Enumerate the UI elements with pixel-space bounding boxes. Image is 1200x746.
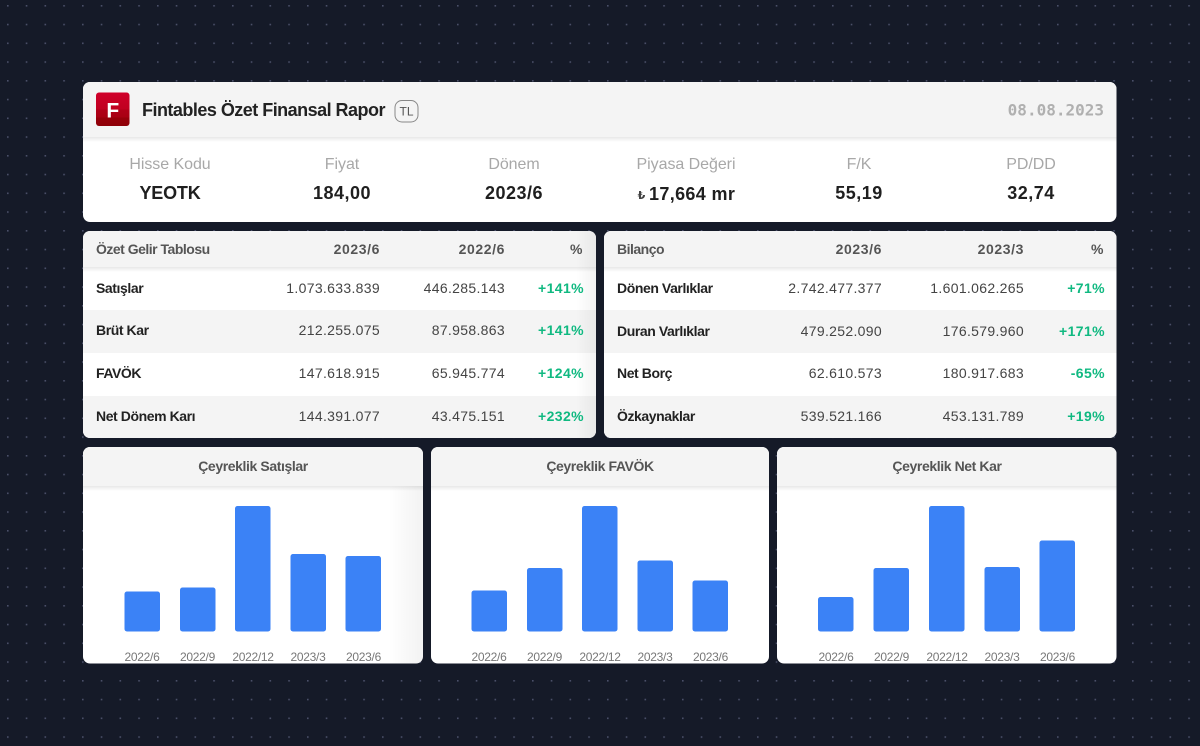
panel: report header and summary xyxy=(83,82,1117,222)
row: equity: 539.521.166 xyxy=(801,408,882,424)
bar chart: 2022/6 xyxy=(472,650,507,664)
row: gross profit: 212.255.075 xyxy=(299,322,380,338)
row: EBITDA: FAVÖK xyxy=(96,365,141,381)
metric: market cap: Piyasa Değeri xyxy=(637,156,735,173)
chart title: Çeyreklik Satışlar xyxy=(198,458,309,474)
metric: P/B: 32,74 xyxy=(1007,183,1055,203)
table header: 2022/6 xyxy=(459,241,505,257)
table header: % xyxy=(570,241,583,257)
bar chart: 2022/6 xyxy=(819,650,854,664)
currency badge xyxy=(395,100,418,122)
row: net income: +232% xyxy=(538,408,584,424)
bar chart: 2022/6 xyxy=(125,650,160,664)
row: sales xyxy=(96,280,584,296)
row: equity xyxy=(617,408,1105,424)
row: net debt: -65% xyxy=(1071,365,1105,381)
bar chart: 2022/9 xyxy=(527,650,563,664)
metric: period xyxy=(485,156,543,203)
bar chart: 2023/3 xyxy=(985,650,1020,664)
metric: P/E: F/K xyxy=(847,156,872,173)
row: current assets: 2.742.477.377 xyxy=(788,280,882,296)
table header: Bilanço xyxy=(617,241,664,257)
row: EBITDA: 147.618.915 xyxy=(299,365,380,381)
metric: period: Dönem xyxy=(488,156,540,173)
table header: 2023/6 xyxy=(836,241,882,257)
bar chart: 2023/6 xyxy=(346,650,382,664)
row: net income: Net Dönem Karı xyxy=(96,408,195,424)
metric: P/E: 55,19 xyxy=(835,183,883,203)
row: net debt: 180.917.683 xyxy=(943,365,1024,381)
metric: price: 184,00 xyxy=(313,183,371,203)
report title: Fintables Özet Finansal Rapor xyxy=(142,100,385,120)
bar chart: 2022/12 xyxy=(926,650,968,664)
table header: Özet Gelir Tablosu xyxy=(96,241,210,257)
metric: P/B: PD/DD xyxy=(1006,156,1056,173)
metric: price: Fiyat xyxy=(325,156,360,173)
table header: % xyxy=(1091,241,1104,257)
row: sales: 446.285.143 xyxy=(424,280,505,296)
row: net debt xyxy=(617,365,1105,381)
panel: quarterly net income chart xyxy=(777,447,1117,664)
bar chart xyxy=(818,506,1076,664)
metric: stock code xyxy=(129,156,211,203)
row: fixed assets xyxy=(617,323,1105,339)
bar chart: 2022/9 xyxy=(180,650,216,664)
row: EBITDA: 65.945.774 xyxy=(432,365,505,381)
bar chart: 2022/12 xyxy=(579,650,621,664)
metric: market cap xyxy=(637,156,735,204)
bar chart: 2023/3 xyxy=(291,650,326,664)
icon: Fintables logo xyxy=(96,92,130,126)
row: gross profit: +141% xyxy=(538,322,584,338)
row: gross profit: Brüt Kar xyxy=(96,322,150,338)
bar chart xyxy=(472,506,729,664)
report date: 08.08.2023 xyxy=(1008,100,1104,120)
row: current assets: Dönen Varlıklar xyxy=(617,280,714,296)
metric: market cap: ₺ xyxy=(638,189,646,202)
bar chart: 2023/6 xyxy=(1040,650,1076,664)
row: current assets xyxy=(617,280,1105,296)
row: net income: 43.475.151 xyxy=(432,408,505,424)
bar chart xyxy=(124,506,382,664)
row: net debt: Net Borç xyxy=(617,365,673,381)
bar chart: 2023/6 xyxy=(693,650,729,664)
panel: income statement table xyxy=(83,231,596,438)
panel: quarterly EBITDA chart xyxy=(431,447,769,664)
bar chart: 2023/3 xyxy=(638,650,673,664)
row: fixed assets: 176.579.960 xyxy=(943,323,1024,339)
metric: P/E xyxy=(835,156,883,203)
row: gross profit: 87.958.863 xyxy=(432,322,505,338)
bar chart: 2022/9 xyxy=(874,650,910,664)
bar chart: 2022/12 xyxy=(232,650,274,664)
row: sales: 1.073.633.839 xyxy=(286,280,380,296)
metric: P/B xyxy=(1006,156,1056,203)
row: equity: 453.131.789 xyxy=(943,408,1024,424)
table header xyxy=(96,241,583,257)
metric: stock code: Hisse Kodu xyxy=(129,156,211,173)
table header xyxy=(617,241,1104,257)
metric: stock code: YEOTK xyxy=(139,183,201,203)
row: sales: Satışlar xyxy=(96,280,144,296)
row: current assets: +71% xyxy=(1067,280,1105,296)
panel: balance sheet table xyxy=(604,231,1117,438)
row: fixed assets: +171% xyxy=(1059,323,1105,339)
panel: quarterly sales chart xyxy=(83,447,423,664)
table header: 2023/6 xyxy=(334,241,380,257)
row: gross profit xyxy=(96,322,584,338)
metric: price xyxy=(313,156,371,203)
row: fixed assets: 479.252.090 xyxy=(801,323,882,339)
row: net income: 144.391.077 xyxy=(299,408,380,424)
metric: period: 2023/6 xyxy=(485,183,543,203)
row: EBITDA xyxy=(96,365,584,381)
row: net debt: 62.610.573 xyxy=(809,365,882,381)
metric: market cap: 17,664 mr xyxy=(649,184,735,204)
row: fixed assets: Duran Varlıklar xyxy=(617,323,710,339)
chart title: Çeyreklik FAVÖK xyxy=(546,458,654,474)
chart title: Çeyreklik Net Kar xyxy=(892,458,1003,474)
row: net income xyxy=(96,408,584,424)
row: equity: +19% xyxy=(1067,408,1105,424)
table header: 2023/3 xyxy=(978,241,1024,257)
row: equity: Özkaynaklar xyxy=(617,408,696,424)
row: EBITDA: +124% xyxy=(538,365,584,381)
row: current assets: 1.601.062.265 xyxy=(930,280,1024,296)
icon: Fintables logo: F xyxy=(106,100,119,122)
row: sales: +141% xyxy=(538,280,584,296)
currency badge: TL xyxy=(399,104,414,118)
